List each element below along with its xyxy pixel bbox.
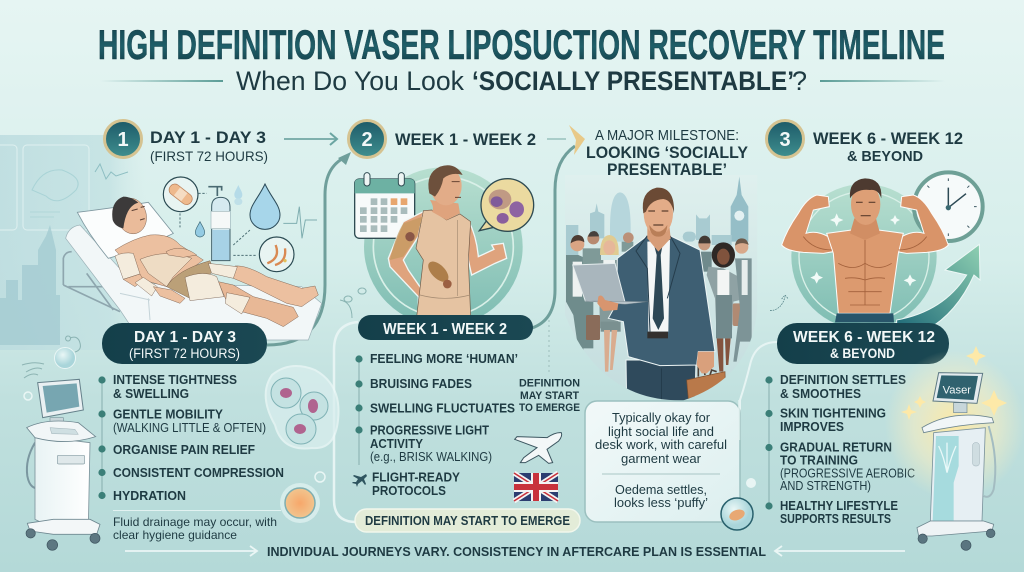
patient [113,195,318,327]
briefcase [698,367,717,377]
week 6-12 list: & SMOOTHES [780,386,861,401]
icon: airplane [515,433,562,463]
day 1 pill: (FIRST 72 HOURS) [129,346,240,361]
day 1 pill: DAY 1 - DAY 3 [134,329,236,346]
week 1-2 list: SWELLING FLUCTUATES [370,400,515,416]
step 2 heading: WEEK 1 - WEEK 2 [395,130,536,149]
day 1 list: ORGANISE PAIN RELIEF [113,442,255,457]
week 6-12 list: TO TRAINING [780,452,858,468]
mattress [66,225,322,340]
sparkles [810,213,916,286]
icon: orange cell [280,472,325,523]
shirt and tie [647,240,670,332]
man head [428,165,463,205]
calendar [355,173,415,238]
green disc [360,167,527,330]
laptop [573,263,625,303]
neck and head [647,225,671,252]
decorative squiggle [340,288,366,318]
definition side note: MAY START [520,390,579,402]
week 6-12 pill: WEEK 6 - WEEK 12 [793,329,935,346]
step 2 heading [348,120,536,158]
week 6-12 list: SUPPORTS RESULTS [780,511,891,526]
icon: small plane [352,474,367,487]
icon: compression bottle [180,187,257,261]
outcome panel: looks less ‘puffy’ [614,496,708,510]
week 6-12 list: DEFINITION SETTLES [780,372,906,387]
green disc [791,184,937,329]
fluid drainage note: Fluid drainage may occur, with [113,515,277,529]
definition side note: TO EMERGE [519,402,580,414]
week 6-12 list: HEALTHY LIFESTYLE [780,498,898,513]
week 6-12 list: SKIN TIGHTENING [780,406,886,420]
week 1-2 pill: WEEK 1 - WEEK 2 [383,321,507,338]
outcome panel: desk work, with careful [595,438,727,452]
london skyline [566,177,748,258]
day 1 pill [102,323,267,364]
outcome panel [585,401,740,522]
day 1 list: HYDRATION [113,488,186,503]
badge 2 [348,120,386,158]
icon: pulse line [283,207,317,238]
badge 3: 3 [779,129,791,151]
fluid drainage note: clear hygiene guidance [113,528,237,542]
day 1 list: CONSISTENT COMPRESSION [113,465,284,480]
outcome panel: light social life and [608,425,714,439]
week 1-2 list: (e.g., BRISK WALKING) [370,450,492,464]
milestone heading: PRESENTABLE’ [607,161,727,179]
week 1-2 list: BRUISING FADES [370,376,472,391]
step 3 heading [766,120,963,165]
week 1-2 list: FLIGHT-READY [372,470,460,484]
milestone heading: A MAJOR MILESTONE: [595,128,739,144]
subtitle: ‘SOCIALLY PRESENTABLE’ [472,66,794,96]
subtitle [100,66,945,96]
man in compression vest [388,212,507,307]
clock [914,172,983,241]
icon: water drop [195,184,280,237]
week 6-12 list [765,372,915,526]
subtitle: When Do You Look [236,66,464,96]
week 6-12 pill: & BEYOND [830,346,895,361]
week 1-2 pill [358,315,533,340]
outcome panel: garment wear [621,452,701,466]
decorative bubbles and cells left [22,336,80,400]
outcome panel: Oedema settles, [615,483,707,497]
step 1 heading: DAY 1 - DAY 3 [150,128,266,147]
day 1 list [98,372,284,503]
icon: fibres [259,237,294,272]
flexer head [850,178,881,225]
illustration: week 1-2 recovering man [355,165,534,330]
step 1 heading: (FIRST 72 HOURS) [150,148,268,164]
day 1 list: & SWELLING [113,386,189,401]
patient hair and face [112,197,145,228]
badge 3 [766,120,804,158]
week 6-12 list: GRADUAL RETURN [780,440,892,454]
footer message [125,544,905,559]
definition pill: DEFINITION MAY START TO EMERGE [365,514,570,528]
icon: vaser device with glow [885,346,1024,550]
week 1-2 list: ACTIVITY [370,436,423,451]
badge 2: 2 [361,129,373,151]
speech bubble with bruises [479,179,534,231]
week 1-2 list: PROGRESSIVE LIGHT [370,422,489,438]
outcome panel: Typically okay for [612,411,710,425]
icon: left device [26,379,100,550]
footer message: INDIVIDUAL JOURNEYS VARY. CONSISTENCY IN AFTERCARE PLAN IS ESSENTIAL [267,544,766,559]
milestone heading [586,128,748,179]
connector arrows [267,125,777,522]
week 6-12 pill [777,323,949,364]
milestone heading: LOOKING ‘SOCIALLY [586,144,748,162]
week 1-2 list: PROTOCOLS [372,483,446,498]
pillow [77,202,173,258]
week 6-12 list: AND STRENGTH) [780,479,871,493]
sparkles [901,346,1007,420]
icon: cells bubble [266,366,339,449]
step 1 heading [104,120,268,164]
growth arrow [897,244,980,330]
badge 1 [104,120,142,158]
jacket [608,236,715,366]
week 6-12 list: (PROGRESSIVE AEROBIC [780,466,915,480]
small curved arrow [770,295,788,311]
week 1-2 list: FEELING MORE ‘HUMAN’ [370,351,518,366]
badge 1: 1 [117,129,129,151]
background dashboard and skyline [0,135,146,350]
week 6-12 list: IMPROVES [780,419,844,434]
day 1 list: INTENSE TIGHTNESS [113,372,237,387]
day 1 list: GENTLE MOBILITY [113,406,223,422]
illustration: socially presentable businessman [560,175,760,405]
flexing man [782,195,948,313]
definition side note: DEFINITION [519,378,580,390]
bed frame [63,252,120,312]
colleagues [566,231,752,372]
step 3 heading: WEEK 6 - WEEK 12 [813,129,963,148]
icon: union flag [514,473,558,501]
illustration: day 1 patient on bed with icons [63,177,322,340]
fluid drainage note [113,510,281,542]
trousers [626,360,696,402]
icon: vaser device with glow: Vaser [943,384,971,396]
definition side note [519,320,580,414]
icon: plaster [163,177,198,212]
icon: fat cell sphere [721,400,756,530]
week 1-2 list [352,351,518,498]
day 1 list: (WALKING LITTLE & OFTEN) [113,421,266,435]
step 3 heading: & BEYOND [847,148,923,165]
illustration: week 6-12 flexing man with clock and arrow [770,172,983,330]
subtitle: ? [792,66,807,96]
definition pill [355,509,580,532]
businessman [573,188,726,402]
